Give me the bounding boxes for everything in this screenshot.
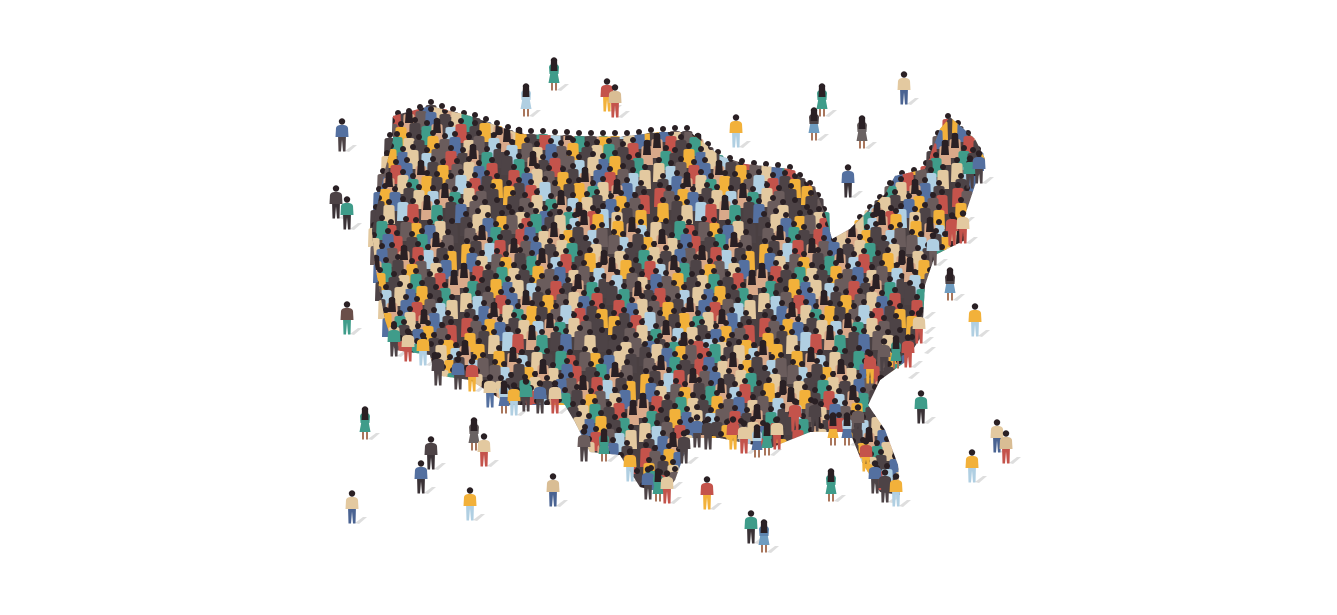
person: top red (600, 78, 622, 112)
person: top waving (520, 83, 541, 117)
person: east blue dress (944, 267, 965, 301)
person: tan and red (478, 433, 499, 467)
person: southeast tan (990, 419, 1012, 453)
person: top grey dress (856, 115, 877, 149)
person: east yellow (968, 303, 990, 337)
person: top blue dress (808, 107, 829, 141)
illustration: crowd of people forming a US map (330, 57, 1021, 553)
person: bottom left tan (346, 490, 367, 524)
shadows of the edge people (397, 177, 994, 507)
people behind the northern and western edge (368, 99, 984, 337)
people along the southern and eastern edge (388, 150, 986, 507)
person: southeast yellow (966, 449, 987, 483)
person: southeast red (1000, 430, 1021, 464)
person: bottom teal dress (826, 468, 846, 502)
person: bottom yellow (464, 487, 485, 521)
person: top tan (608, 84, 630, 118)
person: left pointing (340, 301, 362, 335)
person: lower left blue (414, 460, 436, 494)
crowd map of the United States (368, 99, 994, 520)
person: bottom red (700, 476, 722, 510)
person: bottom teal (744, 510, 766, 544)
person: top teal dress (548, 57, 569, 91)
person: grey dress (468, 417, 489, 451)
person: left suit (330, 185, 351, 219)
person: east teal (914, 390, 936, 424)
person: top teal (816, 83, 837, 117)
person: lower left suit (424, 436, 446, 470)
person: top yellow (730, 114, 751, 148)
person: bottom backpack (546, 473, 568, 507)
person: lower left teal dress (360, 406, 380, 440)
person: bottom blue dress (758, 519, 779, 553)
person: top right tan (898, 71, 919, 105)
person: left teal (340, 196, 362, 230)
person: far left blue (336, 118, 357, 152)
person: upper middle blue (842, 164, 863, 198)
